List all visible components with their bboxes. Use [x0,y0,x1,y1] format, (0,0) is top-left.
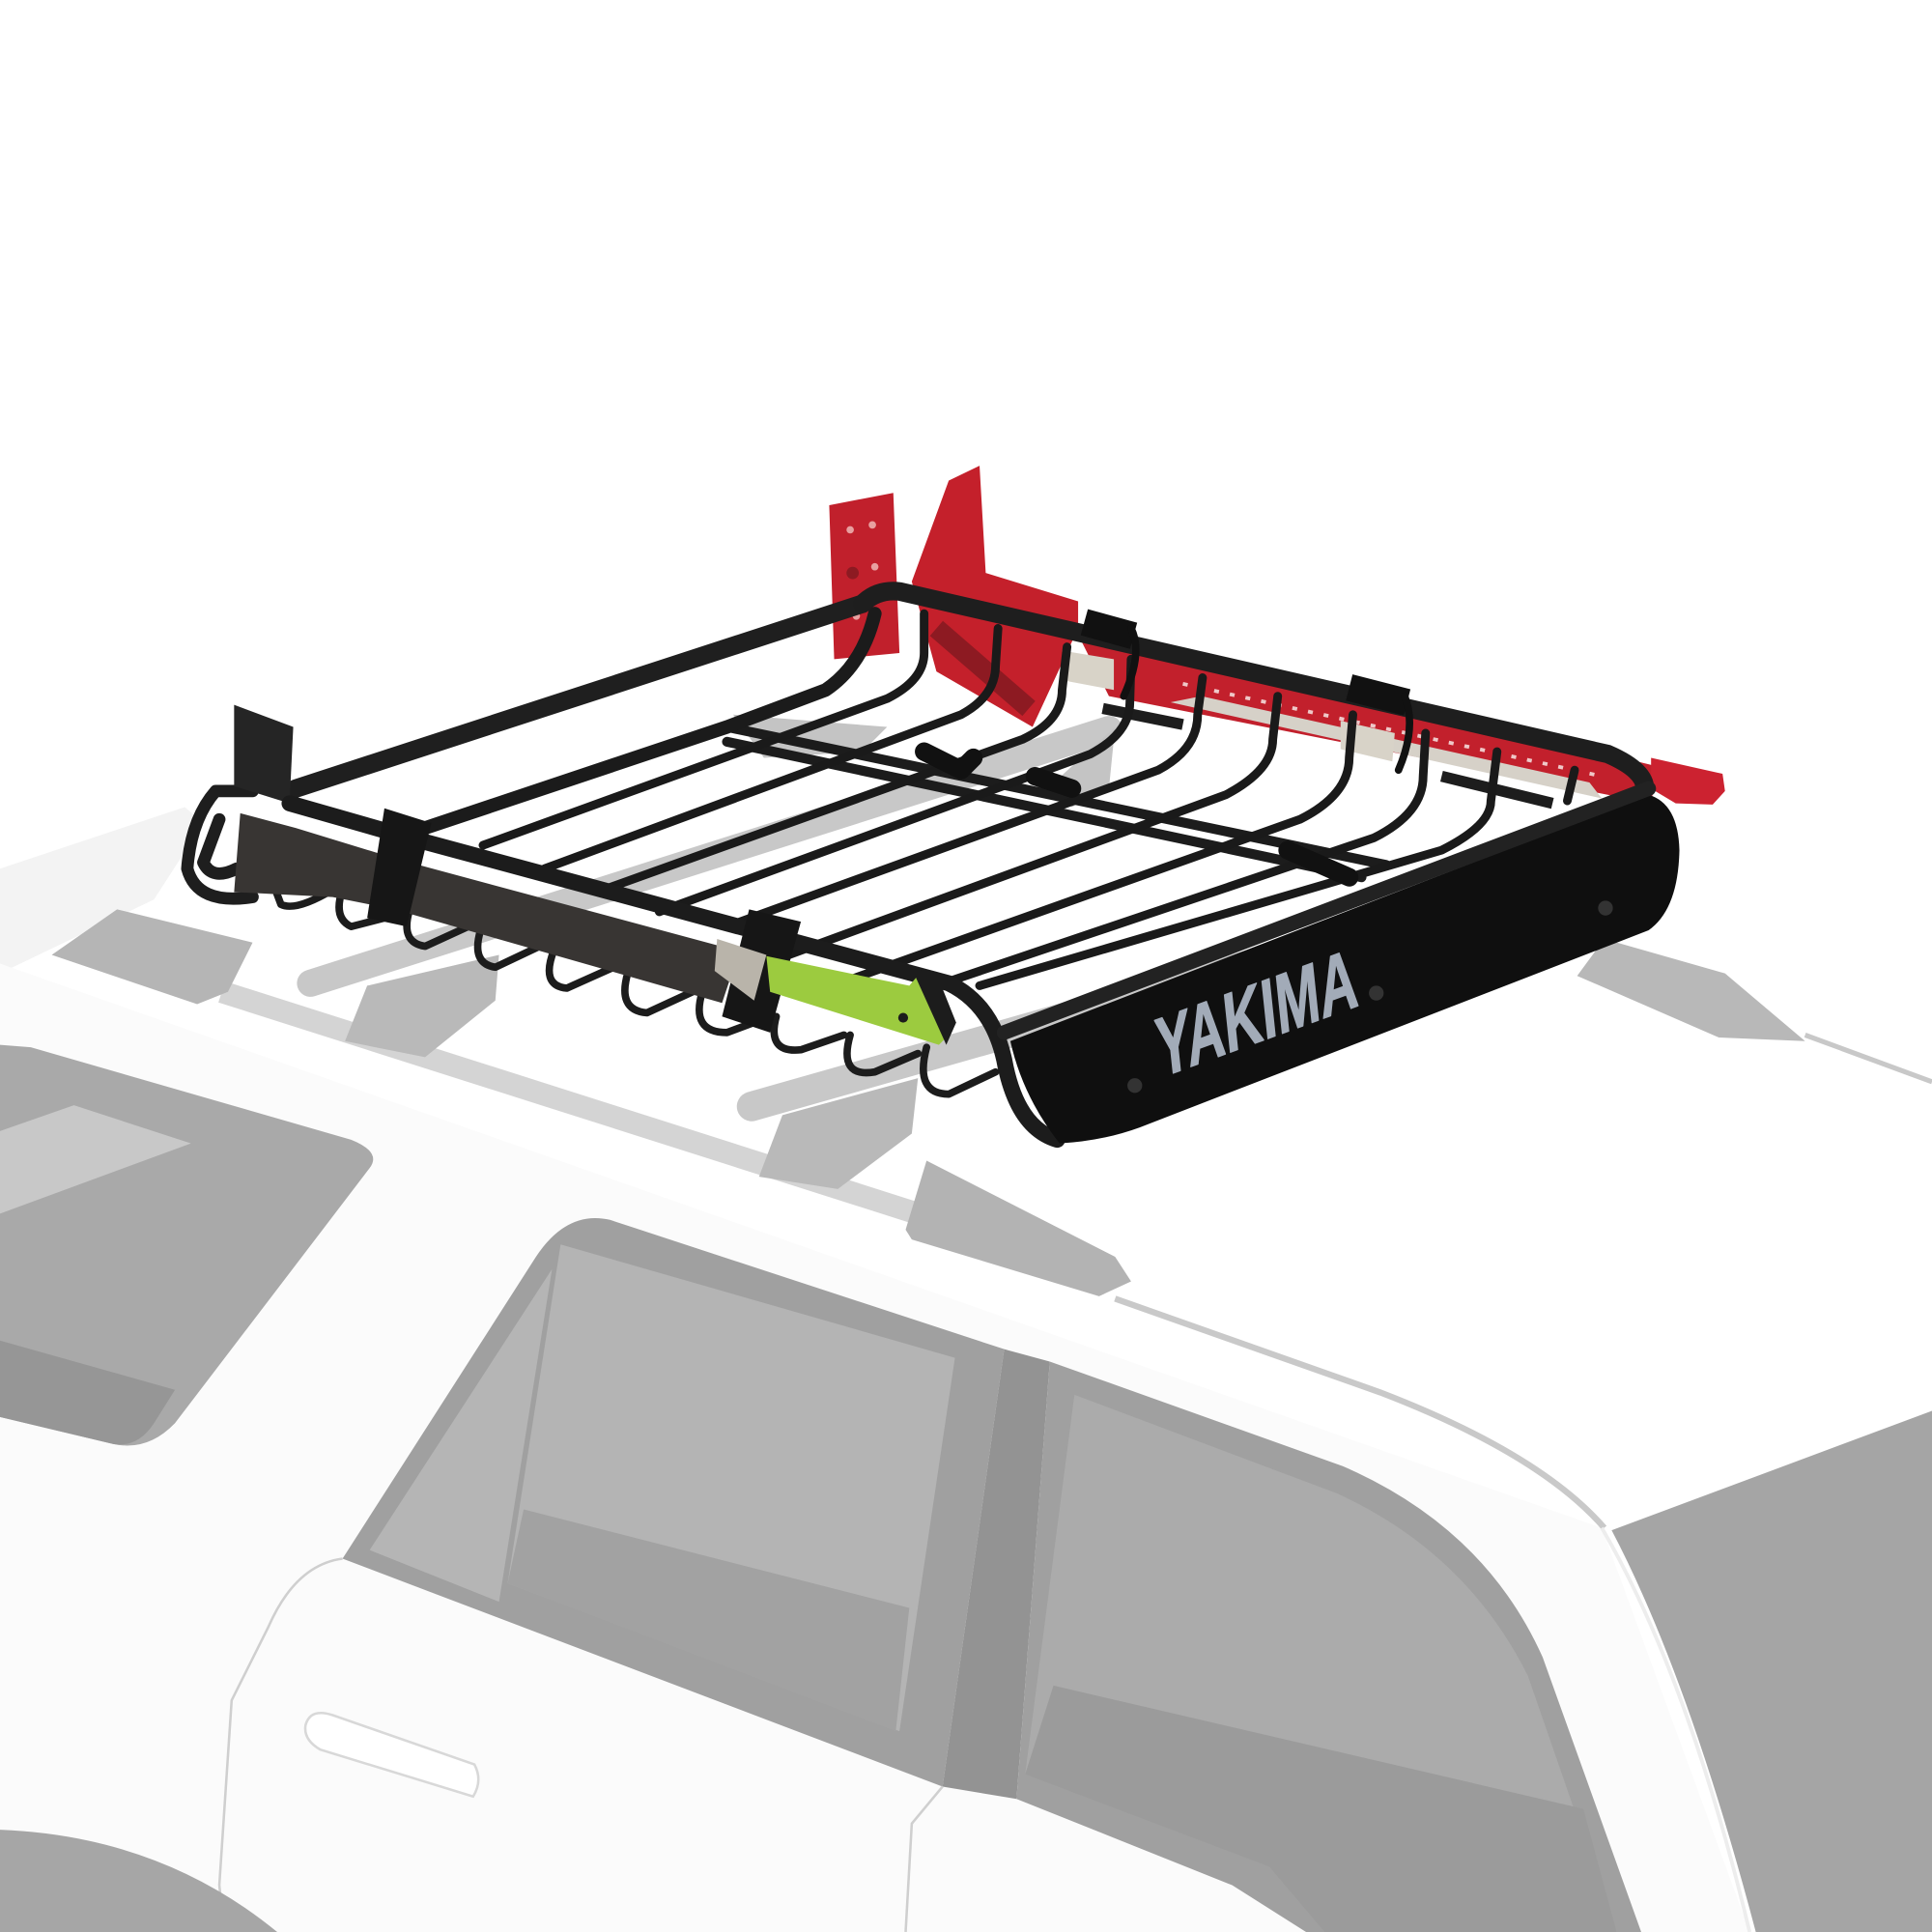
door seam [219,1559,943,1932]
jack dark shaft [1103,708,1552,804]
ghosted car [0,715,1932,1932]
jack bar silver section [1171,696,1602,799]
window reflection [0,1105,191,1213]
side clamp right [722,909,801,1033]
roof rail foot middle [906,1161,1131,1296]
roof rail foot right [1577,939,1805,1041]
jack tip [1651,757,1725,805]
rear door window [343,1218,1005,1786]
roof left edge shading [0,807,203,974]
jack spire [912,466,1078,727]
crossbar left [310,729,1109,983]
collar straps [1123,629,1409,770]
under-basket cross supports [727,727,1386,877]
rear quarter window [0,1045,373,1445]
rail collars [1084,622,1407,702]
logo: YAKIMA [1151,929,1361,1096]
side clamp left [367,809,431,926]
crossbar tower right [759,1078,918,1189]
side rail tube [290,804,1057,1140]
roof panel [49,788,1932,1528]
wheel arch [0,1830,277,1932]
roof basket [187,591,1680,1144]
silver band [715,939,766,1001]
roof rail [222,992,918,1213]
basket wires [483,613,1575,992]
crossbar right [752,899,1479,1106]
wind fairing [1005,788,1680,1144]
silver clamps [1062,650,1395,761]
red hi-lift jack [829,466,1725,805]
door handle [305,1713,478,1797]
fairing top tube [1005,788,1649,1033]
door pillar [943,1350,1050,1799]
lower body side panel [0,963,1749,1932]
fairing rivets [1127,1078,1142,1093]
front door window [1016,1361,1641,1932]
crossbar tower left [345,955,499,1057]
rear left rail [296,604,863,788]
green handle [766,956,956,1045]
basket clamps [924,752,1350,877]
roof rail foot left [52,909,252,1005]
flag fin [234,705,294,804]
jack holes [1182,684,1602,777]
crossbar tower rear [733,715,1115,807]
jack bar [1072,622,1658,804]
windshield [1611,1410,1932,1932]
jack mounting plate [829,493,899,659]
front end loop [187,791,252,898]
car body [0,739,1932,1932]
rear rail [863,591,1645,788]
inner thick rail [425,613,875,828]
side bar [234,813,739,1003]
hanging hooks [273,885,996,1094]
roof gutter line [1115,1298,1605,1528]
